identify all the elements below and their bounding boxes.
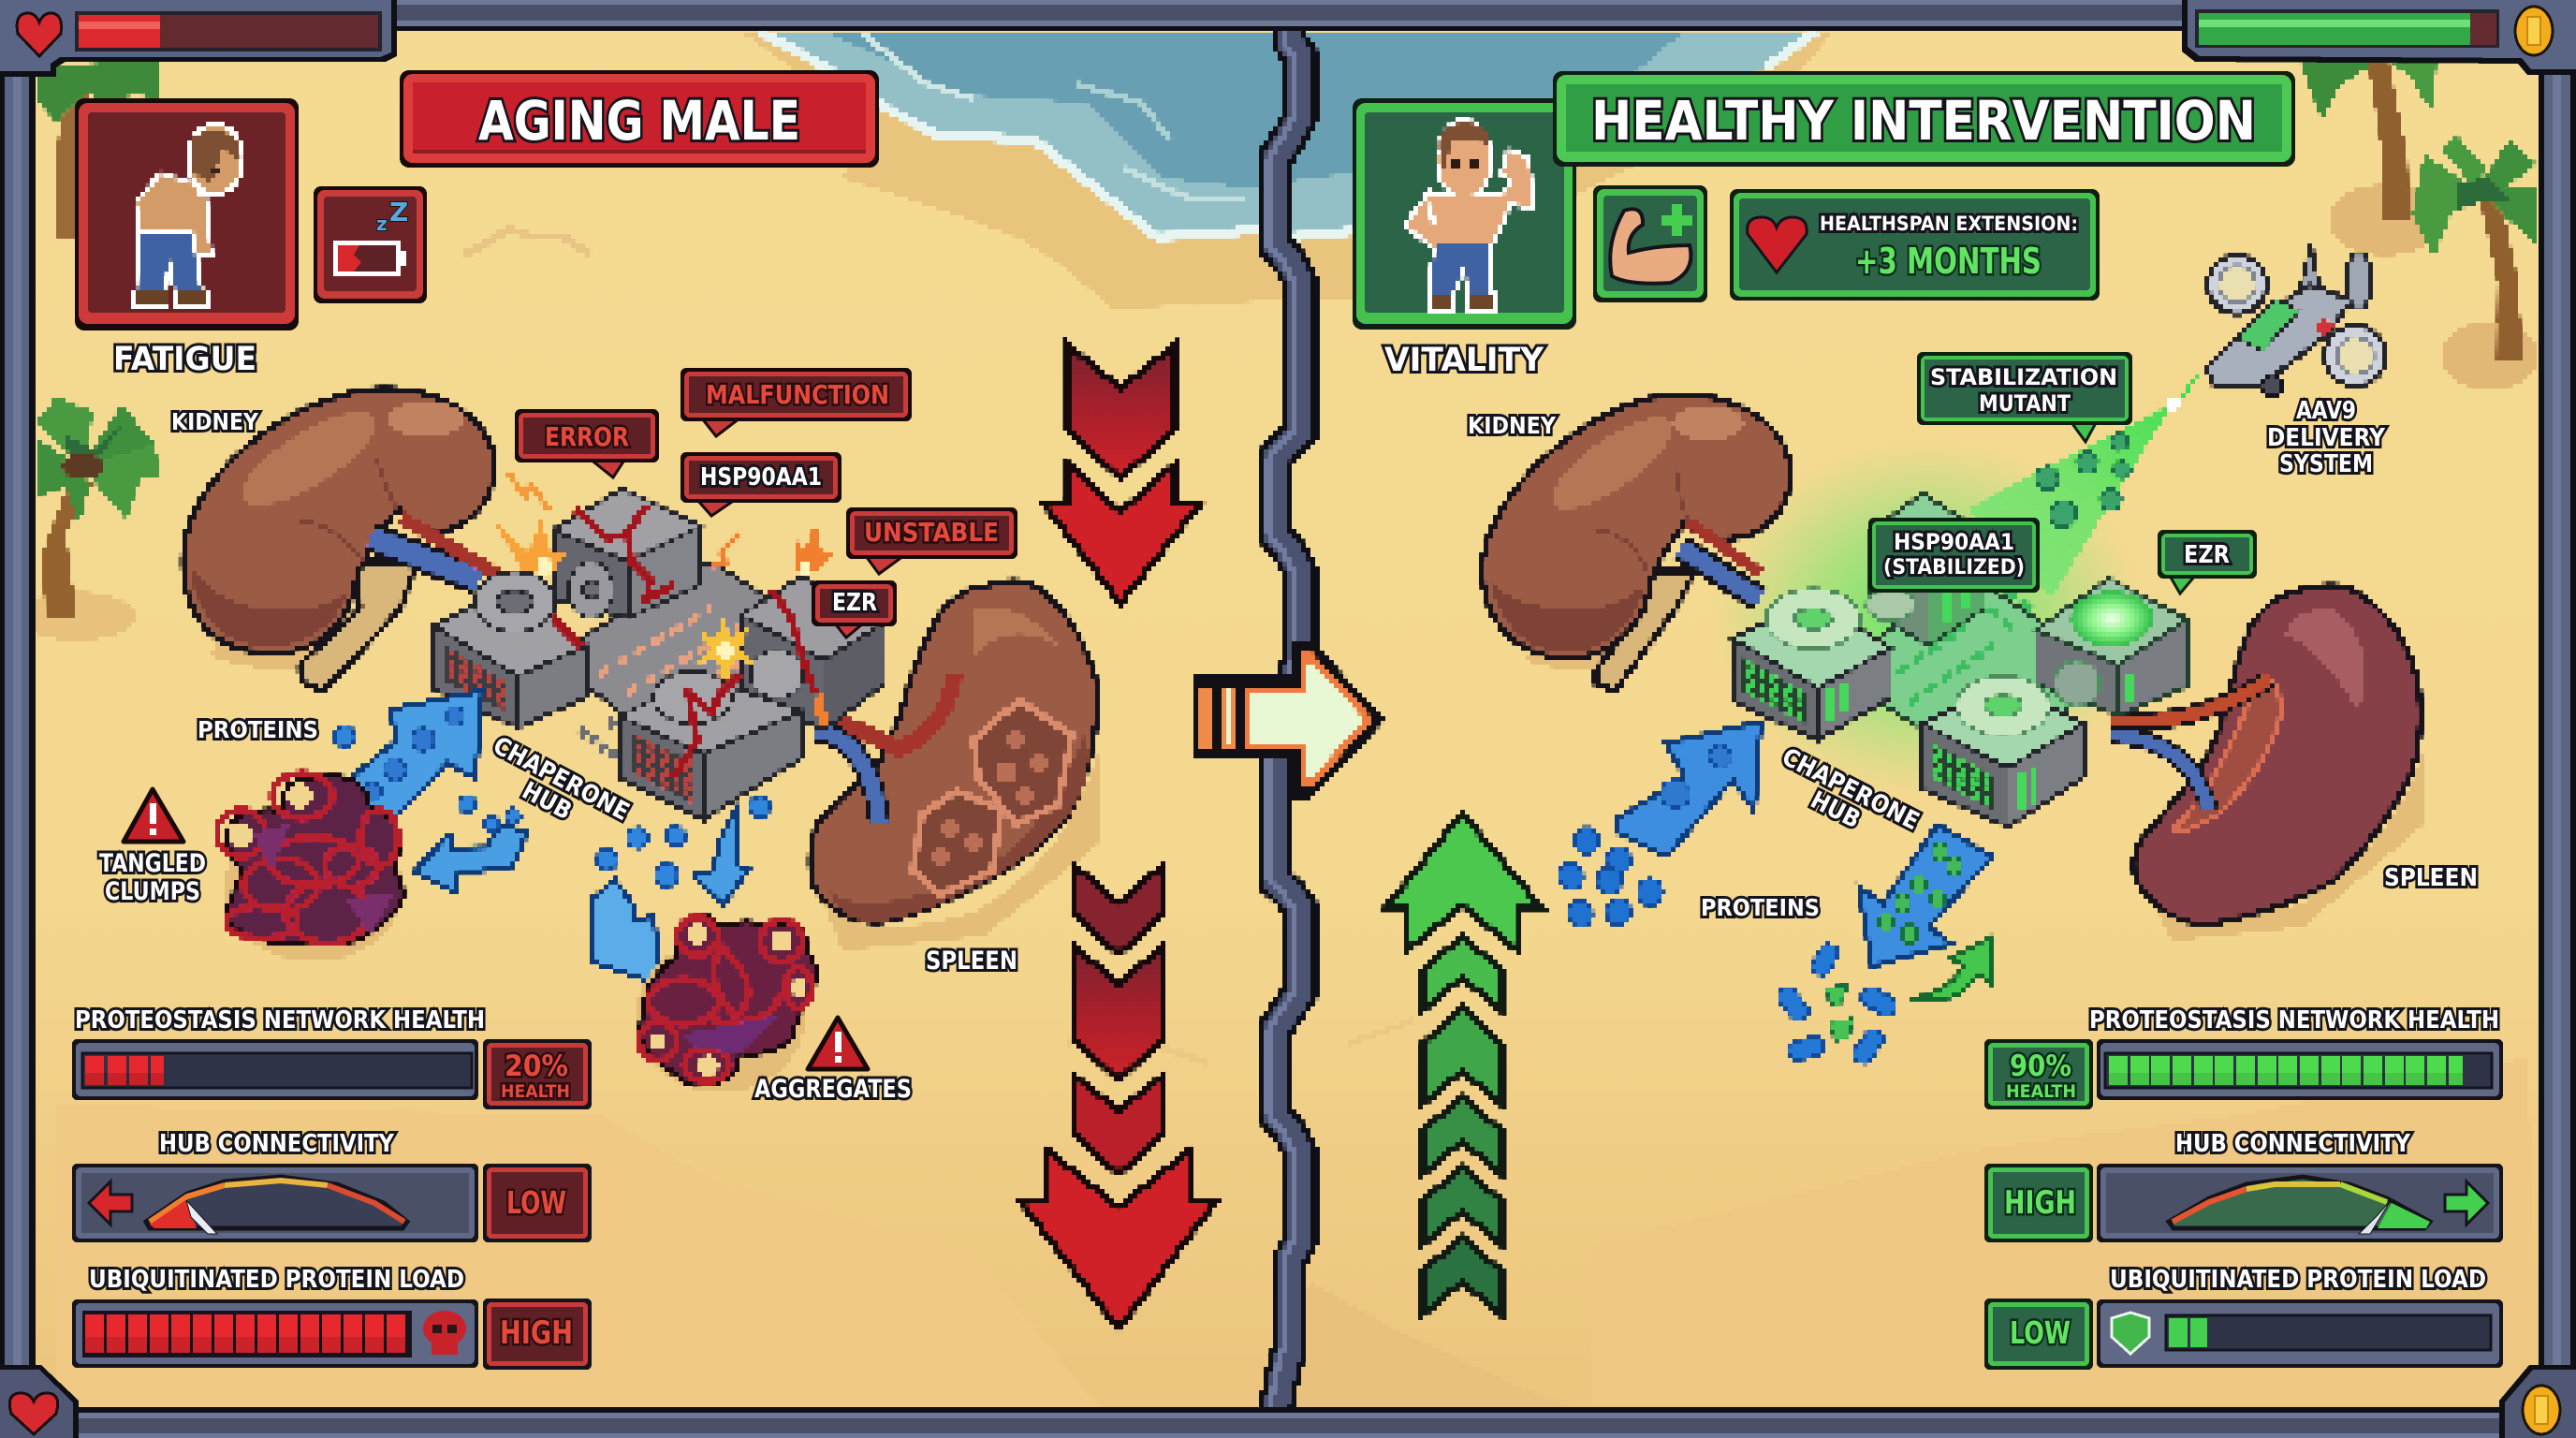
circuit board bbox=[552, 562, 842, 758]
right cube bbox=[741, 577, 885, 730]
gears bbox=[1766, 589, 2100, 736]
arrow: proteins entering hub bbox=[342, 691, 482, 823]
left cube with green grid bbox=[1733, 599, 1891, 740]
label: fatigue: FATIGUE bbox=[113, 341, 256, 378]
front cube with green grid bbox=[1923, 683, 2084, 827]
callout: hsp90aa1 bbox=[681, 452, 842, 516]
transition arrow bbox=[1192, 639, 1385, 800]
label: hub connectivity left: HUB CONNECTIVITY bbox=[159, 1130, 395, 1158]
badge: 90 percent health bbox=[1984, 1039, 2093, 1109]
sparks bbox=[496, 473, 833, 730]
label: aav9 delivery system: DELIVERY bbox=[2267, 424, 2386, 452]
center divider wall bbox=[1268, 28, 1300, 1414]
badge: low right bbox=[1984, 1299, 2093, 1370]
portrait card: strong man bbox=[1353, 98, 1576, 330]
label: aggregates: AGGREGATES bbox=[754, 1075, 912, 1104]
left cube with red grid bbox=[434, 585, 586, 727]
right cube with glowing core bbox=[2036, 579, 2188, 715]
palm: right bbox=[2412, 136, 2539, 389]
back cube bbox=[553, 489, 700, 618]
title: aging male bbox=[400, 70, 879, 168]
arrow: proteins into repaired hub bbox=[1618, 722, 1761, 857]
icon card: low battery with zzz bbox=[314, 186, 427, 303]
red cracks bbox=[552, 506, 814, 777]
icon: skull bbox=[423, 1311, 466, 1355]
green glow bbox=[1713, 440, 2144, 796]
label: ubiquitinated right: UBIQUITINATED PROTEIN LOAD bbox=[2110, 1266, 2486, 1294]
bottom left corner with heart bbox=[0, 1365, 79, 1438]
folded protein capsules bbox=[1775, 941, 1898, 1066]
circuit board bbox=[1835, 571, 2115, 768]
badge: low: LOW bbox=[506, 1184, 566, 1221]
left gauges bbox=[72, 1006, 592, 1370]
bottom right corner with coin bbox=[2499, 1365, 2576, 1438]
arrow: broken down bbox=[694, 811, 748, 904]
palm: top left bbox=[38, 61, 160, 241]
foam bbox=[759, 31, 1351, 237]
gauge: hub connectivity low bbox=[72, 1164, 478, 1242]
bottom bar bbox=[0, 1407, 2576, 1438]
badge: low right: LOW bbox=[2010, 1314, 2071, 1351]
label: tangled clumps: TANGLED bbox=[99, 849, 206, 878]
tangled clump left bbox=[217, 773, 402, 961]
label: proteostasis left: PROTEOSTASIS NETWORK HEALTH bbox=[75, 1006, 485, 1034]
label: spleen right: SPLEEN bbox=[2384, 864, 2478, 892]
panel: healthspan extension: HEALTHSPAN EXTENSION: bbox=[1820, 213, 2078, 235]
label: chaperone hub left: HUB bbox=[518, 777, 576, 826]
sea and shoreline bbox=[739, 31, 1835, 309]
callout: error: ERROR bbox=[545, 421, 629, 452]
wet sand band bbox=[739, 31, 1835, 309]
callout: ezr right bbox=[2158, 530, 2257, 594]
callout: ezr left: EZR bbox=[832, 589, 877, 617]
badge: high: HIGH bbox=[500, 1314, 573, 1352]
icon: gold coin top right bbox=[2515, 7, 2553, 55]
healing beam bbox=[1967, 370, 2202, 596]
badge: high bbox=[483, 1299, 592, 1370]
badge: high right bbox=[1984, 1164, 2093, 1242]
callout: stabilization mutant bbox=[1917, 352, 2132, 442]
bar: proteostasis 90 percent bbox=[2097, 1039, 2503, 1100]
kidney right bbox=[1483, 394, 1790, 691]
callout: hsp90aa1 stabilized: (STABILIZED) bbox=[1883, 556, 2025, 580]
front cube with red grid bbox=[619, 677, 801, 819]
top right corner with vitality bar bbox=[2182, 0, 2576, 75]
icon card: low battery with zzz: Z bbox=[389, 197, 408, 227]
protein dots left bbox=[334, 726, 769, 887]
top bar bbox=[0, 0, 2576, 31]
badge: 20 percent health: 20% bbox=[505, 1049, 568, 1083]
palm: mid left bbox=[19, 397, 161, 640]
spleen left bbox=[805, 581, 1100, 950]
green up arrows bbox=[1386, 814, 1541, 1314]
warning: tangled clumps bbox=[124, 789, 183, 842]
label: hub connectivity right: HUB CONNECTIVITY bbox=[2175, 1130, 2411, 1158]
icon card: flexing arm plus bbox=[1593, 185, 1707, 302]
palm: top right bbox=[2299, 58, 2441, 256]
badge: 90 percent health: 90% bbox=[2010, 1049, 2071, 1083]
callout: ezr left bbox=[812, 580, 897, 638]
label: chaperone hub left: CHAPERONE bbox=[489, 732, 634, 827]
callout: malfunction bbox=[681, 368, 912, 436]
label: aav9 delivery system bbox=[2267, 397, 2386, 478]
label: vitality: VITALITY bbox=[1384, 342, 1544, 379]
deep water bbox=[824, 31, 1685, 187]
warning: aggregates bbox=[808, 1018, 868, 1069]
label: tangled clumps: CLUMPS bbox=[105, 877, 200, 906]
portrait card: fatigued man bbox=[75, 98, 299, 330]
arrow: folded proteins out bbox=[1859, 825, 1992, 966]
callout: error bbox=[515, 409, 659, 477]
badge: 90 percent health: HEALTH bbox=[2006, 1081, 2076, 1102]
label: chaperone hub right: CHAPERONE bbox=[1778, 743, 1924, 836]
label: kidney right: KIDNEY bbox=[1468, 412, 1557, 439]
sea water bbox=[759, 31, 1816, 237]
red down arrows lower bbox=[1020, 865, 1216, 1328]
kidney left bbox=[183, 389, 500, 691]
callout: ezr right: EZR bbox=[2184, 541, 2230, 569]
label: ubiquitinated left: UBIQUITINATED PROTEIN LOAD bbox=[89, 1266, 464, 1294]
label: aav9 delivery system: AAV9 bbox=[2296, 397, 2356, 425]
bar: ubiquitinated protein low bbox=[2097, 1299, 2503, 1368]
badge: 20 percent health bbox=[483, 1039, 592, 1109]
right panel: healthy intervention bbox=[1353, 71, 2478, 1066]
callout: hsp90aa1: HSP90AA1 bbox=[700, 463, 822, 492]
left panel: aging male bbox=[75, 70, 1100, 1104]
bar: proteostasis 20 percent bbox=[72, 1039, 478, 1100]
callout: unstable: UNSTABLE bbox=[864, 517, 999, 548]
aggregate clump bbox=[637, 917, 816, 1093]
callout: malfunction: MALFUNCTION bbox=[706, 379, 889, 410]
label: chaperone hub right: HUB bbox=[1806, 786, 1865, 834]
arrow: green recycle bbox=[1910, 936, 1992, 1000]
icon: heart top left bbox=[17, 13, 62, 56]
callout: hsp90aa1 stabilized bbox=[1868, 518, 2040, 593]
callout: stabilization mutant: MUTANT bbox=[1979, 390, 2071, 417]
arrow: protein into aggregate bbox=[592, 880, 662, 985]
badge: low bbox=[483, 1164, 592, 1242]
right gauges bbox=[1984, 1006, 2503, 1370]
arrow: broken left bbox=[415, 824, 527, 892]
title: healthy intervention: HEALTHY INTERVENTION bbox=[1591, 89, 2256, 153]
callout: hsp90aa1 stabilized: HSP90AA1 bbox=[1894, 529, 2014, 555]
panel: healthspan extension bbox=[1730, 189, 2100, 301]
title: aging male: AGING MALE bbox=[478, 89, 800, 153]
red down arrows upper bbox=[1044, 345, 1200, 603]
label: proteostasis right: PROTEOSTASIS NETWORK HEALTH bbox=[2089, 1006, 2499, 1034]
title: healthy intervention bbox=[1553, 71, 2295, 167]
panel: healthspan extension: +3 MONTHS bbox=[1855, 241, 2042, 282]
badge: 20 percent health: HEALTH bbox=[501, 1081, 570, 1102]
bar: ubiquitinated protein high bbox=[72, 1299, 478, 1368]
label: kidney left: KIDNEY bbox=[171, 408, 259, 435]
label: proteins right: PROTEINS bbox=[1701, 894, 1820, 921]
chaperone hub right: repaired machine bbox=[1733, 493, 2188, 827]
drone delivery vehicle bbox=[2206, 244, 2385, 396]
top left corner with health bar bbox=[0, 0, 397, 77]
callout: unstable bbox=[846, 507, 1017, 574]
chaperone hub left: damaged machine bbox=[434, 473, 885, 819]
badge: high right: HIGH bbox=[2004, 1184, 2076, 1222]
icon card: low battery with zzz: z bbox=[376, 213, 388, 235]
right bar bbox=[2539, 0, 2576, 1438]
back cube bbox=[1868, 493, 1984, 646]
label: tangled clumps bbox=[99, 849, 206, 906]
gauge: hub connectivity high bbox=[2097, 1164, 2503, 1242]
icon: shield bbox=[2112, 1313, 2149, 1354]
gears bbox=[475, 562, 803, 724]
protein dots right bbox=[1559, 828, 1662, 927]
label: spleen left: SPLEEN bbox=[926, 946, 1017, 976]
spleen right bbox=[2112, 586, 2424, 941]
label: proteins left: PROTEINS bbox=[198, 716, 318, 743]
label: aav9 delivery system: SYSTEM bbox=[2279, 450, 2373, 478]
callout: stabilization mutant: STABILIZATION bbox=[1930, 364, 2117, 390]
left bar bbox=[0, 0, 36, 1438]
